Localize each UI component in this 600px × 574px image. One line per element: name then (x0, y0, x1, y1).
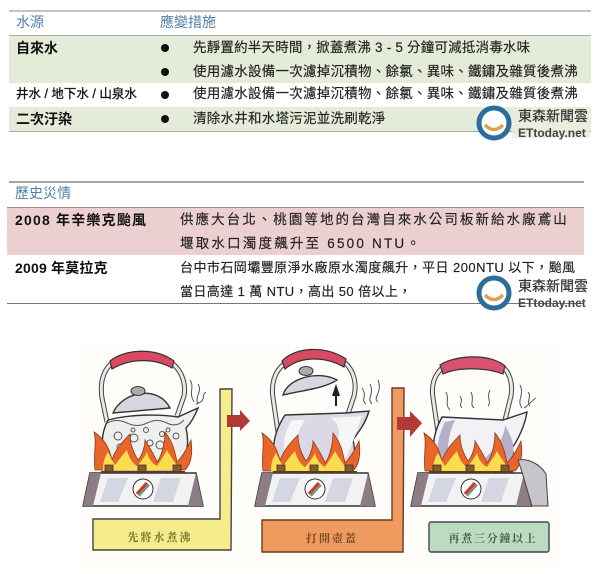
step 2 label: 打開壺蓋 (306, 530, 358, 546)
measure text: 使用濾水設備一次濾掉沉積物、餘氯、異味、鐵鏽及雜質後煮沸 (193, 86, 578, 101)
row label: tap water: 自來水 (16, 40, 58, 56)
body (102, 408, 198, 468)
logo: ETtoday watermark bottom (476, 276, 588, 310)
bullet (161, 91, 169, 99)
step 1 label: 先將水煮沸 (128, 529, 192, 545)
removed lid (518, 460, 548, 506)
logo: ETtoday watermark bottom: 東森新聞雲 (518, 278, 588, 294)
logo: ETtoday watermark top: 東森新聞雲 (518, 108, 588, 124)
arrow 2 (397, 411, 422, 437)
heading: historical disasters: 歷史災情 (15, 185, 71, 201)
panel: historical disasters table (7, 181, 584, 304)
measure text: 清除水井和水塔污泥並洗刷乾淨 (193, 111, 386, 126)
lid (113, 393, 170, 413)
row label: well water: 井水 / 地下水 / 山泉水 (16, 87, 137, 101)
step 2: open lid (255, 349, 379, 506)
panel: water source table (9, 10, 591, 132)
handle (101, 364, 185, 422)
arrow 1 (227, 410, 250, 431)
open lid (283, 376, 337, 395)
logo: ETtoday watermark top (476, 106, 590, 140)
measure text: 先靜置約半天時間，掀蓋煮沸 3 - 5 分鐘可減抵消毒水味 (193, 40, 530, 55)
step 1: boil kettle (83, 351, 206, 506)
description 2009 line 2: 當日高達 1 萬 NTU，高出 50 倍以上， (180, 284, 412, 299)
illustration background (78, 345, 558, 570)
step 3 label: 再煮三分鐘以上 (449, 530, 537, 546)
row label: 2009: 2009 年莫拉克 (15, 260, 108, 276)
row band: 2008 (7, 207, 584, 255)
steam (190, 380, 206, 404)
green step box (429, 522, 549, 552)
step 3: boil three minutes (411, 357, 548, 506)
logo: ETtoday watermark bottom: ETtoday.net (518, 296, 586, 310)
bullet (161, 68, 169, 76)
logo: ETtoday watermark top: ETtoday.net (518, 126, 586, 140)
description 2009 line 1: 台中市石岡壩豐原淨水廠原水濁度飆升，平日 200NTU 以下，颱風 (180, 260, 575, 275)
description 2008 line 1: 供應大台北、桃園等地的台灣自來水公司板新給水廠鳶山 (180, 212, 569, 227)
row band: secondary pollution (9, 107, 591, 132)
row label: secondary pollution: 二次汙染 (16, 111, 72, 127)
body (274, 411, 369, 468)
bullet (161, 115, 169, 123)
row label: 2008: 2008 年辛樂克颱風 (15, 212, 147, 228)
bullet (161, 44, 169, 52)
measure text: 使用濾水設備一次濾掉沉積物、餘氯、異味、鐵鏽及雜質後煮沸 (193, 64, 578, 79)
row band: tap water (9, 35, 591, 83)
yellow step frame (93, 389, 232, 550)
heading: response measures: 應變措施 (160, 14, 216, 30)
heading: water source: 水源 (16, 14, 44, 30)
orange step frame (262, 388, 404, 552)
burner (83, 465, 203, 506)
flames (94, 432, 192, 470)
description 2008 line 2: 堰取水口濁度飆升至 6500 NTU。 (180, 236, 422, 251)
